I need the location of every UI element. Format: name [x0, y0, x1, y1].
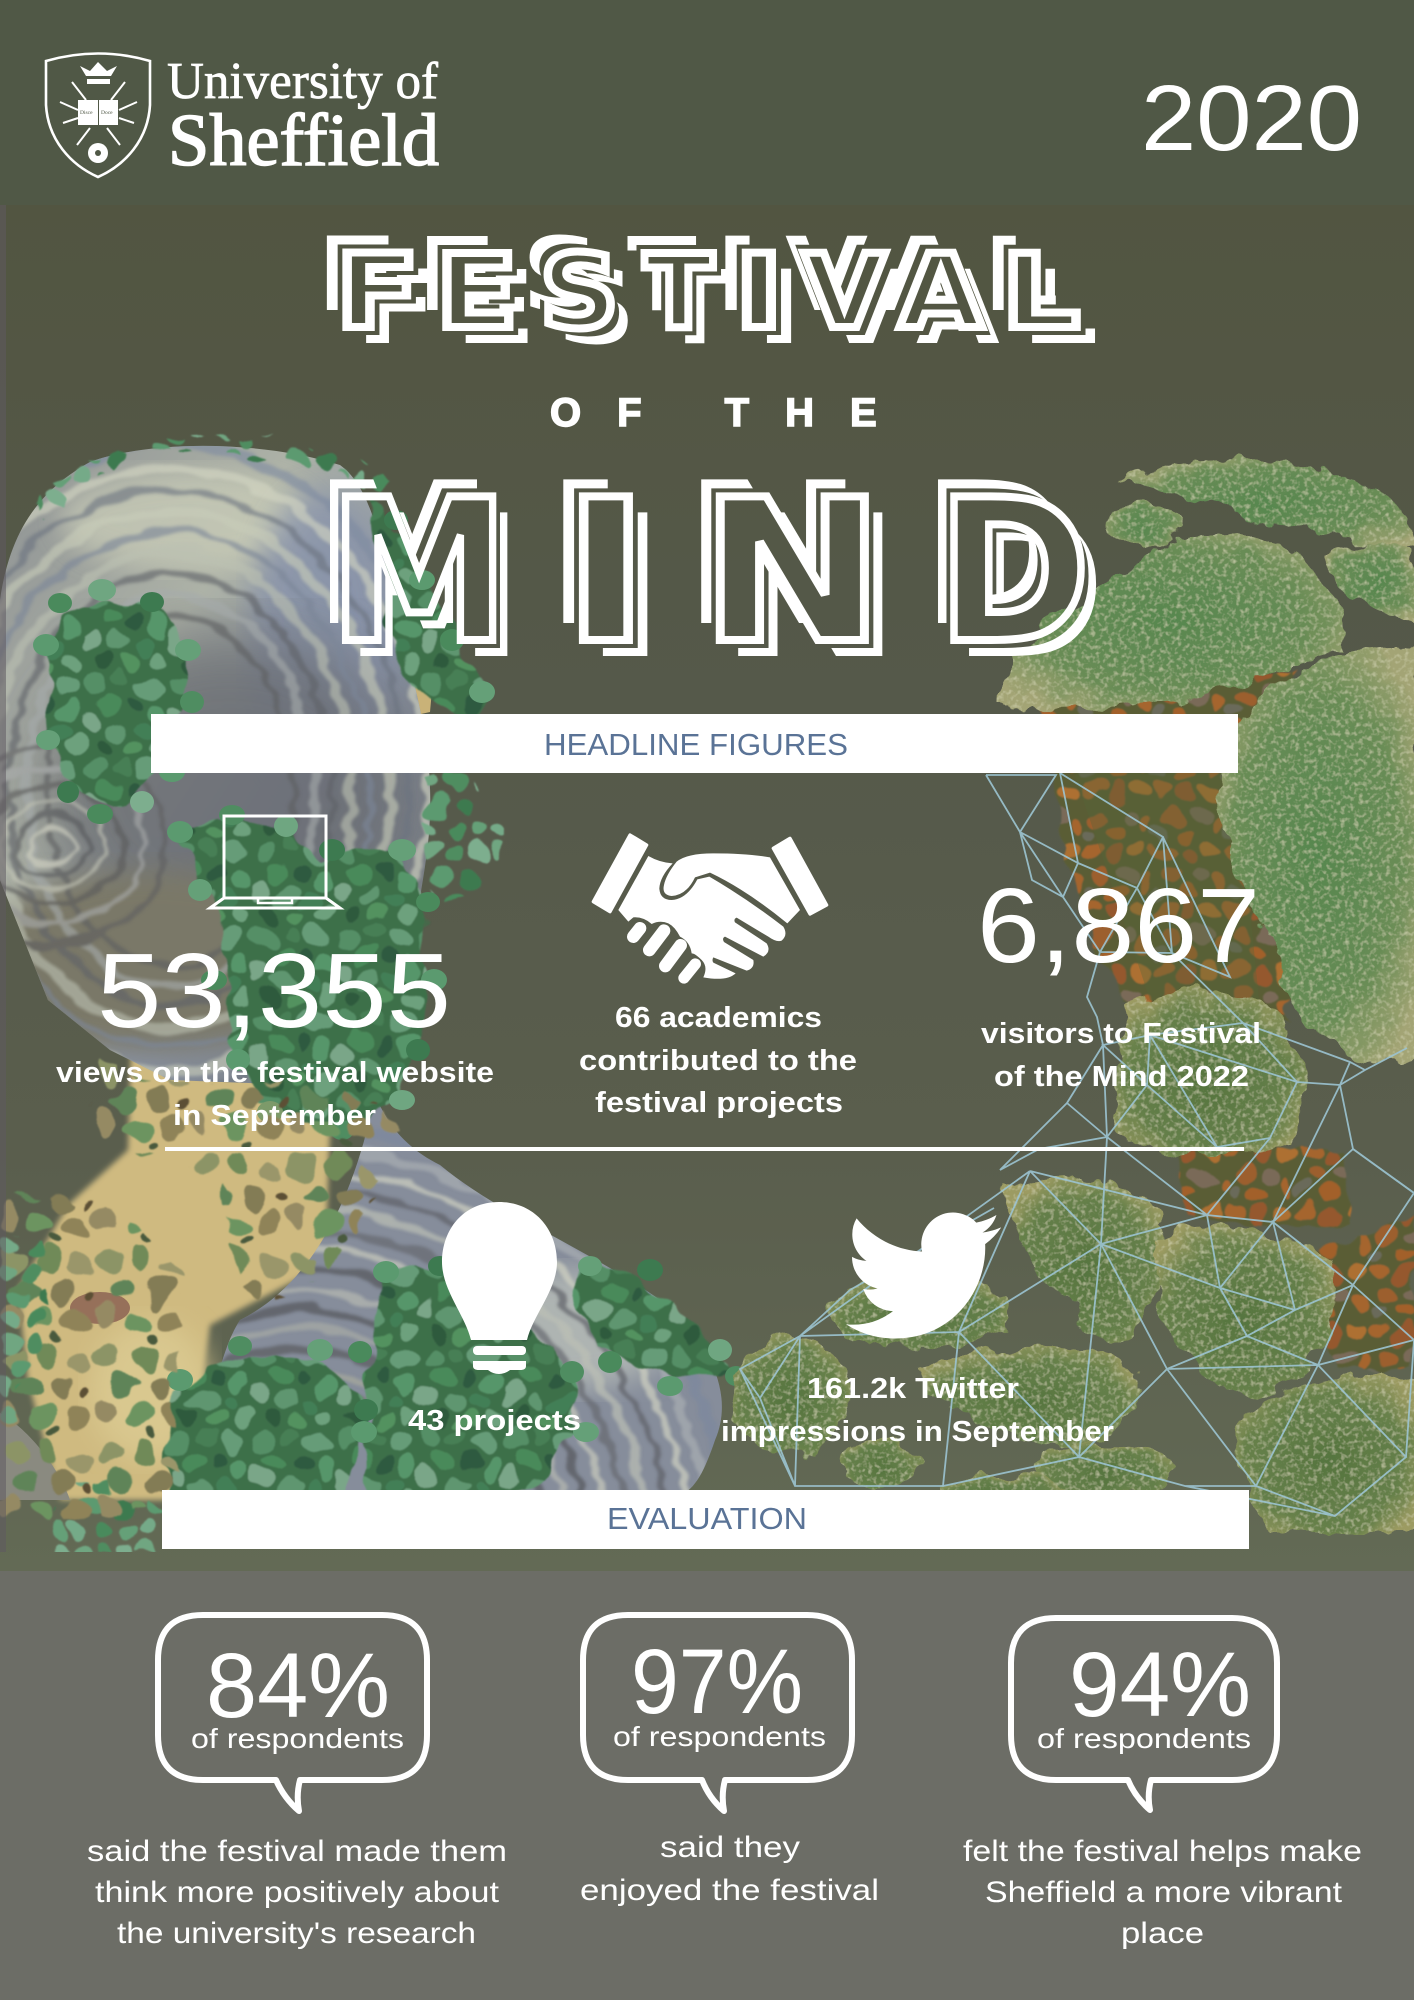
stat: website views: views on the festival website	[56, 1057, 494, 1089]
title: Mind: N	[700, 458, 885, 687]
year: 2020	[1141, 66, 1362, 170]
scattered leaves around the cluster edges	[33, 510, 747, 1443]
panel: 84 percent: think more positively about	[95, 1876, 500, 1909]
icon: university shield	[46, 54, 150, 177]
stat: projects: 43 projects	[408, 1405, 581, 1437]
stat: visitors: visitors to Festival	[981, 1018, 1261, 1050]
panel: 97 percent: 97%	[631, 1631, 803, 1733]
title: Festival: T	[644, 233, 714, 352]
muted olive leaves on the body	[0, 1060, 400, 1530]
stat: visitors: 6,867	[977, 867, 1260, 985]
moss clusters on the right	[732, 460, 1414, 1530]
panel: 97 percent: enjoyed the festival	[580, 1874, 879, 1907]
heading bar: evaluation	[162, 1490, 1249, 1549]
panel: 94 percent: 94%	[1069, 1634, 1251, 1736]
panel: 97 percent: of respondents	[613, 1721, 826, 1752]
dark moss backing	[1079, 773, 1258, 1000]
divider line	[165, 1147, 1244, 1151]
panel: 94 percent	[963, 1618, 1362, 1950]
title: Mind: I	[562, 458, 650, 687]
silver shoulder sculpture	[222, 1106, 722, 1490]
logo: University of Sheffield	[46, 53, 439, 182]
wireframe mesh	[740, 773, 1414, 1516]
panel: 84 percent: 84%	[206, 1635, 390, 1737]
panel: 94 percent: of respondents	[1037, 1723, 1251, 1754]
stat: website views	[56, 932, 494, 1132]
title: Festival: I	[735, 233, 783, 352]
panel: 94 percent: place	[1121, 1917, 1204, 1950]
left edge strip	[0, 205, 6, 1552]
panel: 84 percent: said the festival made them	[87, 1835, 507, 1868]
title: Mind: M	[329, 458, 509, 687]
panel: 94 percent: felt the festival helps make	[963, 1835, 1362, 1868]
stat: website views: 53,355	[97, 932, 451, 1050]
speech bubble 3	[1011, 1618, 1277, 1810]
background artwork	[0, 205, 1414, 1552]
heading bar: headline figures: HEADLINE FIGURES	[544, 727, 848, 762]
stat: academics	[579, 1002, 857, 1119]
green leaf clusters on the head	[36, 435, 732, 1552]
panel: 94 percent: Sheffield a more vibrant	[985, 1876, 1343, 1909]
title: Festival: A	[899, 233, 983, 352]
stat: academics: 66 academics	[615, 1002, 822, 1034]
icon: university shield: Doce	[101, 110, 113, 116]
silver head sculpture	[0, 446, 430, 1084]
title: Festival: S	[540, 233, 619, 352]
speech bubble 1	[158, 1615, 427, 1811]
title: Festival: F	[336, 233, 419, 352]
stat: website views: in September	[173, 1100, 376, 1132]
title: Mind	[329, 458, 1096, 687]
stat: visitors	[977, 867, 1261, 1093]
stat: academics: contributed to the	[579, 1045, 857, 1077]
heading bar: headline figures	[151, 714, 1238, 773]
orange pebble clusters	[1040, 670, 1414, 1370]
title: Festival	[326, 233, 1096, 352]
title: Festival: E	[436, 233, 518, 352]
stat: twitter impressions	[721, 1373, 1114, 1448]
icon: handshake	[593, 835, 827, 979]
header band	[0, 0, 1414, 205]
logo: University of Sheffield: University of	[167, 53, 439, 110]
stat: academics: festival projects	[595, 1087, 843, 1119]
speech bubble 2	[583, 1615, 852, 1811]
stat: twitter impressions: 161.2k Twitter	[807, 1373, 1019, 1405]
panel: 84 percent	[87, 1615, 507, 1950]
panel: 84 percent: of respondents	[191, 1723, 404, 1754]
title: of the: OF THE	[550, 391, 913, 435]
panel: 84 percent: the university's research	[117, 1917, 476, 1950]
stat: twitter impressions: impressions in September	[721, 1416, 1114, 1448]
title: Festival: V	[803, 233, 886, 352]
logo: University of Sheffield: Sheffield	[168, 100, 439, 182]
yellow body sculpture	[0, 545, 432, 1500]
title: Mind: D	[937, 458, 1091, 687]
icon: light bulb	[442, 1202, 557, 1374]
title: Festival: L	[1002, 233, 1079, 352]
icon: university shield: Disce	[80, 110, 93, 116]
icon: laptop	[210, 816, 340, 908]
icon: twitter bird	[846, 1213, 1001, 1339]
stat: visitors: of the Mind 2022	[994, 1061, 1249, 1093]
panel: 97 percent	[580, 1615, 879, 1907]
heading bar: evaluation: EVALUATION	[607, 1501, 807, 1536]
panel: 97 percent: said they	[660, 1831, 800, 1864]
